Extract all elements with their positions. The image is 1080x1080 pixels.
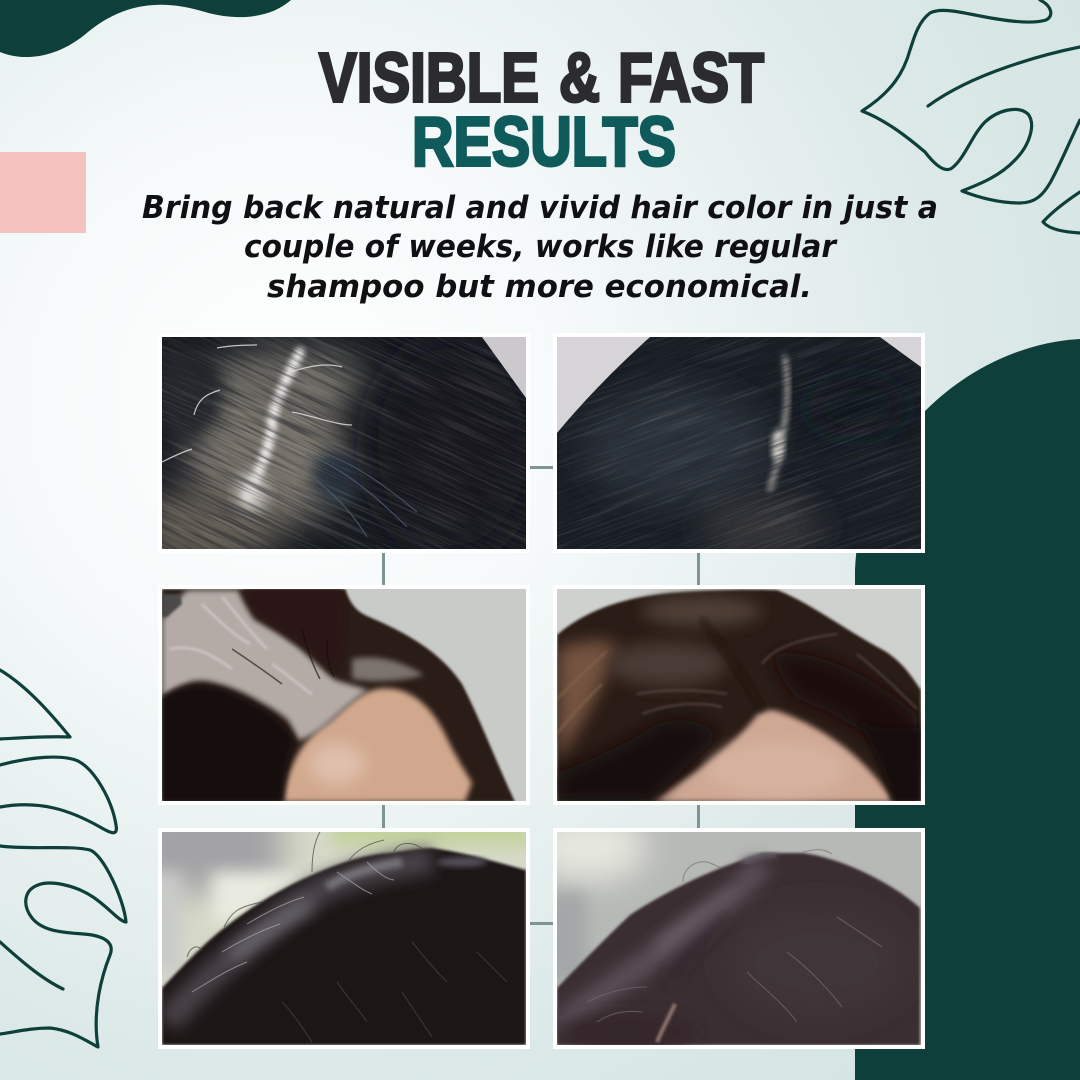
subtitle: Bring back natural and vivid hair color in just a	[142, 190, 938, 226]
title line: visible and fast: FAST	[618, 38, 764, 116]
subtitle: couple of weeks, works like regular	[244, 229, 838, 265]
photo: after, dark even side part	[553, 828, 925, 1049]
subtitle: shampoo but more economical.	[267, 269, 812, 305]
title line: visible and fast	[319, 38, 764, 116]
title	[319, 38, 764, 180]
title line: visible and fast: &	[559, 38, 600, 116]
photo: before, grey strands along side part	[158, 828, 530, 1049]
connectors between photos	[382, 466, 700, 925]
title line: visible and fast: VISIBLE	[319, 38, 539, 116]
dark green top-left blob	[0, 0, 291, 57]
dark green arch shape	[855, 339, 1080, 1080]
leaf outline: bottom left	[0, 670, 126, 1047]
pink square	[0, 152, 86, 233]
photo: before, grey roots at hairline	[158, 585, 530, 805]
photo: after, dark brown hairline	[553, 585, 925, 805]
subtitle	[142, 190, 938, 305]
photo: after, darkened parting top view	[553, 333, 925, 553]
photo: before, grey parting top view	[162, 333, 530, 553]
leaf outline: top right	[862, 0, 1080, 233]
title line: results: RESULTS	[412, 102, 676, 180]
